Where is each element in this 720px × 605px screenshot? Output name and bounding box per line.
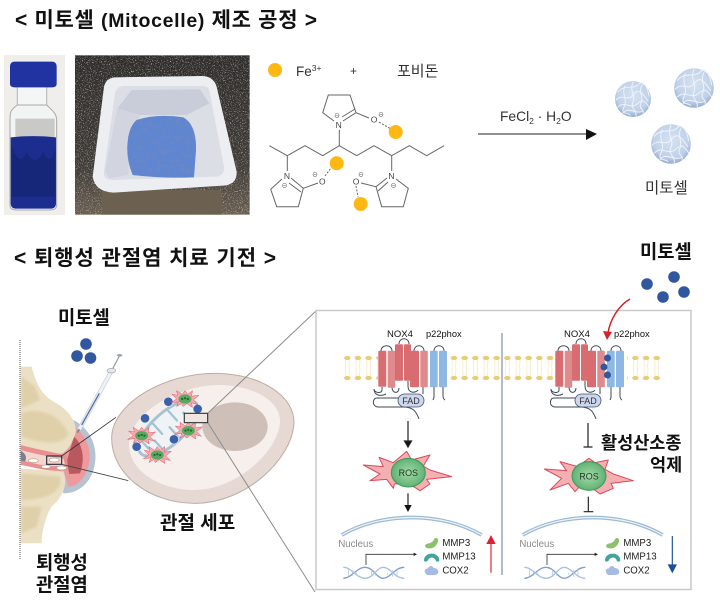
chemical structure: iron coordinated polyvinylpyrrolidone: ⊖ — [334, 113, 340, 120]
right side: ROS burst — [544, 458, 633, 494]
label: NOX4: NOX4 — [387, 329, 413, 340]
label: p22phox: p22phox — [426, 329, 462, 339]
chemical structure: iron coordinated polyvinylpyrrolidone: N — [284, 171, 290, 181]
left side: nucleus and gene expression: MMP13 — [442, 552, 476, 563]
arrow: activates ROS — [404, 421, 412, 447]
label: osteoarthritis — [36, 552, 88, 595]
heading: osteoarthritis treatment mechanism: < 퇴행성 관절염 치료 기전 > — [14, 247, 276, 270]
callout: reactive oxygen species suppression: 억제 — [650, 455, 682, 475]
legend: iron ion plus povidone — [268, 63, 439, 80]
chemical structure: iron coordinated polyvinylpyrrolidone: ⊖ — [390, 183, 397, 190]
inhibition bar — [584, 423, 592, 447]
zoom lines from cell to panel — [208, 311, 316, 592]
right side: ROS burst: ROS — [579, 471, 599, 481]
heading: mitocelle manufacturing process: < 미토셀 (Mitocelle) 제조 공정 > — [15, 9, 317, 32]
label: FAD: FAD — [579, 396, 597, 406]
right side: nucleus and gene expression — [519, 497, 677, 578]
left side: ROS burst: ROS — [399, 468, 418, 478]
label: reagent: FeCl — [500, 109, 529, 124]
bone lower — [21, 468, 65, 543]
mitochondrion — [130, 391, 207, 465]
chemical structure: iron coordinated polyvinylpyrrolidone: N — [388, 171, 395, 181]
chemical structure: iron coordinated polyvinylpyrrolidone: O — [353, 176, 360, 186]
joint capsule — [57, 418, 96, 493]
label: FAD: FAD — [402, 396, 420, 406]
receptor: NOX4 and p22phox — [373, 339, 447, 419]
chemical structure: iron coordinated polyvinylpyrrolidone: ⊖ — [378, 112, 384, 119]
right side: nucleus and gene expression: Nucleus — [519, 539, 554, 550]
label: reagent: 2 — [556, 116, 561, 126]
chemical structure: iron coordinated polyvinylpyrrolidone: N — [336, 120, 342, 130]
arrow: up regulation — [486, 535, 496, 573]
ROS bursts — [128, 391, 202, 463]
bone upper — [21, 367, 76, 454]
label: p22phox: p22phox — [614, 329, 650, 339]
photo: vial of blue solution — [4, 55, 65, 215]
nucleus — [202, 402, 268, 451]
label: mitocelle (left): 미토셀 — [58, 307, 110, 328]
receptor: NOX4 and p22phox — [550, 339, 624, 419]
label: NOX4: NOX4 — [564, 329, 590, 340]
right side: nucleus and gene expression: MMP3 — [623, 538, 651, 549]
label: reagent: O — [561, 109, 572, 124]
label: mitocelle: 미토셀 — [645, 179, 688, 197]
panel: molecular mechanism — [316, 310, 691, 590]
callout: reactive oxygen species suppression — [601, 433, 682, 475]
icon: mitocelle dots (top right) — [641, 271, 690, 303]
membrane: lipid bilayer — [342, 350, 664, 386]
arrow: mitocelle to receptor — [603, 299, 630, 340]
left side: nucleus and gene expression: Nucleus — [338, 539, 373, 550]
icon: iron ion — [268, 63, 282, 77]
chemical structure: iron coordinated polyvinylpyrrolidone: O — [319, 176, 326, 186]
chemical structure: iron coordinated polyvinylpyrrolidone — [269, 95, 444, 211]
right side: nucleus and gene expression: COX2 — [623, 565, 650, 576]
chemical structure: iron coordinated polyvinylpyrrolidone: ⊖ — [281, 183, 288, 190]
left side: ROS burst — [363, 451, 452, 491]
label: reagent: · H — [534, 109, 556, 124]
illustration: knee joint with injection — [20, 340, 128, 560]
joint space — [21, 445, 68, 471]
chemical structure: iron coordinated polyvinylpyrrolidone: ⊖ — [358, 172, 364, 179]
plus sign: + — [350, 64, 357, 78]
illustration: joint cell — [112, 373, 294, 503]
icon: mitocelle particles — [615, 68, 714, 164]
chemical structure: iron coordinated polyvinylpyrrolidone: O — [371, 114, 378, 124]
label: Fe3+: 3+ — [312, 63, 321, 73]
icon: bound mitocelle — [600, 354, 611, 378]
left side: nucleus and gene expression: MMP3 — [442, 538, 470, 549]
label: osteoarthritis: 관절염 — [36, 574, 88, 595]
left side: NOX4 complex without treatment — [373, 329, 462, 447]
mitocelle dots — [132, 397, 202, 451]
reaction arrow with reagent — [478, 109, 597, 140]
right side: NOX4 complex with mitocelle — [550, 329, 650, 447]
left side: nucleus and gene expression — [338, 493, 496, 578]
label: joint cell: 관절 세포 — [160, 512, 235, 534]
label: mitocelle (top right): 미토셀 — [640, 241, 692, 262]
right side: nucleus and gene expression: MMP13 — [623, 552, 657, 563]
chemical structure: iron coordinated polyvinylpyrrolidone: ⊖ — [312, 172, 318, 179]
photo: blue powder in weighing tray — [75, 55, 250, 215]
label: povidone: 포비돈 — [397, 63, 439, 80]
icon: mitocelle dots (left) — [71, 338, 96, 364]
label: Fe3+: Fe — [296, 64, 312, 79]
callout: reactive oxygen species suppression: 활성산소종 — [601, 433, 682, 453]
cell body — [112, 373, 294, 503]
label: reagent: 2 — [529, 116, 534, 126]
left side: nucleus and gene expression: COX2 — [442, 565, 469, 576]
syringe — [77, 354, 122, 433]
label: osteoarthritis: 퇴행성 — [36, 552, 88, 573]
arrow: down regulation — [668, 536, 677, 573]
